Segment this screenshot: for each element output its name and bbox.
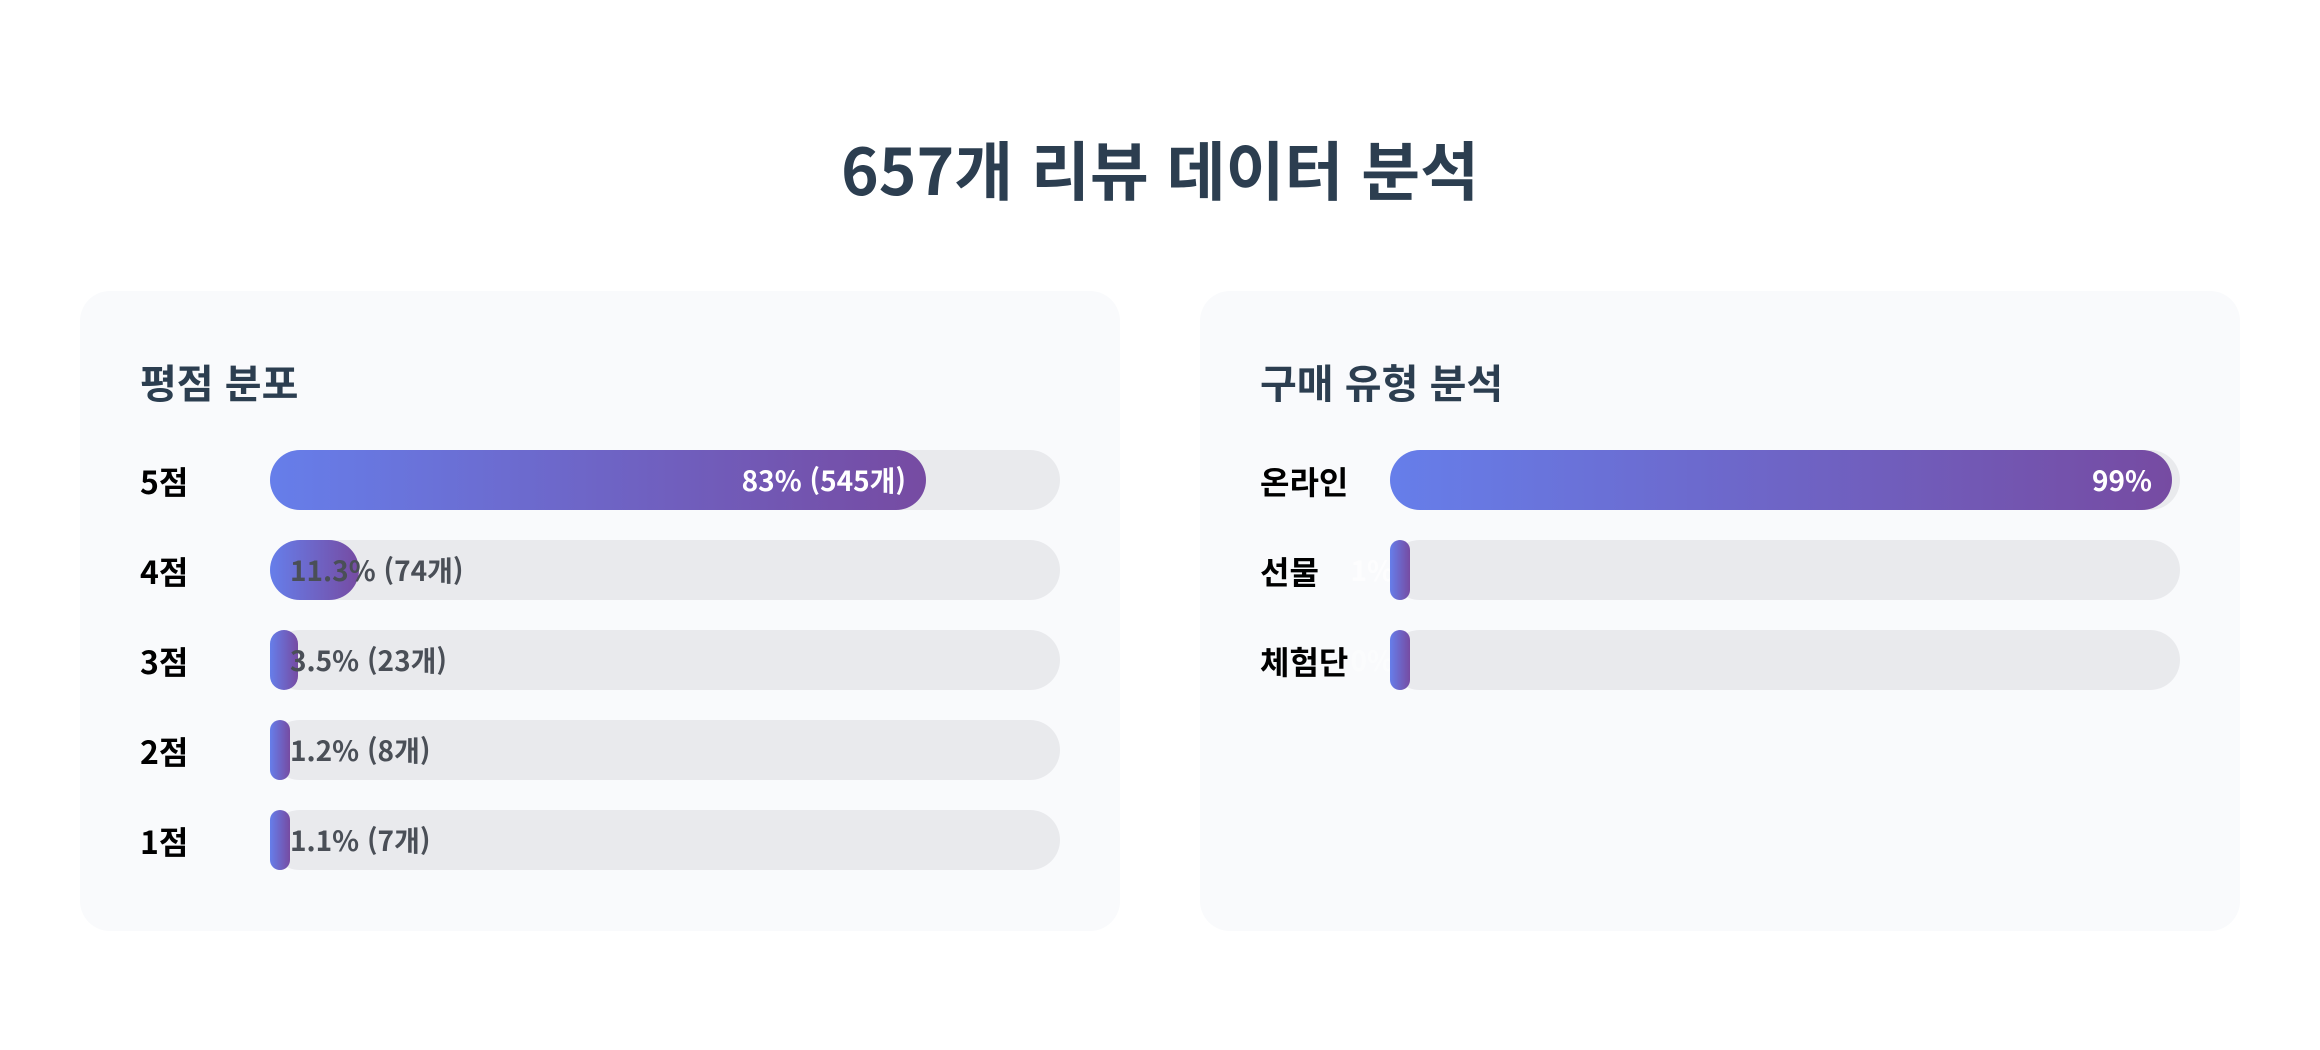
bar: 99% — [1390, 450, 2180, 510]
label: 1 point: 1점 — [140, 818, 188, 864]
row: 5 points — [140, 450, 1060, 510]
bar: 1.1% — [270, 810, 1060, 870]
row: gift — [1260, 540, 2180, 600]
label: 5 points: 5점 — [140, 458, 188, 504]
bar: 99%: 99% — [2092, 460, 2152, 500]
row: 2 points — [140, 720, 1060, 780]
panel: rating distribution — [80, 291, 1120, 931]
heading: rating distribution: 평점 분포 — [140, 352, 298, 410]
bar: 11.3%: 11.3% (74개) — [290, 550, 463, 590]
label: reviewers: 체험단 — [1260, 638, 1348, 684]
bar: 83%: 83% (545개) — [742, 460, 906, 500]
bar: 1.1%: 1.1% (7개) — [290, 820, 430, 860]
bar: reviewers — [1390, 630, 2180, 690]
row: online — [1260, 450, 2180, 510]
label: 3 points: 3점 — [140, 638, 188, 684]
label: online: 온라인 — [1260, 458, 1348, 504]
bar: 1.2% — [270, 720, 1060, 780]
title: 657개 리뷰 데이터 분석 — [841, 122, 1479, 214]
panel: purchase type analysis — [1200, 291, 2240, 931]
row: gift: 1% — [1351, 550, 1394, 590]
bar: gift — [1390, 540, 2180, 600]
bar: 3.5% — [270, 630, 1060, 690]
label: 2 points: 2점 — [140, 728, 188, 774]
row: 4 points — [140, 540, 1060, 600]
label: gift: 선물 — [1260, 548, 1319, 594]
heading: purchase type analysis: 구매 유형 분석 — [1260, 352, 1503, 410]
bar: 11.3% — [270, 540, 1060, 600]
row: 1 point — [140, 810, 1060, 870]
bar: 83% — [270, 450, 1060, 510]
label: 4 points: 4점 — [140, 548, 188, 594]
row: 3 points — [140, 630, 1060, 690]
bar: 3.5%: 3.5% (23개) — [290, 640, 447, 680]
bar: 1.2%: 1.2% (8개) — [290, 730, 430, 770]
row: reviewers — [1260, 630, 2180, 690]
row: reviewers: 0% — [1351, 640, 1394, 680]
